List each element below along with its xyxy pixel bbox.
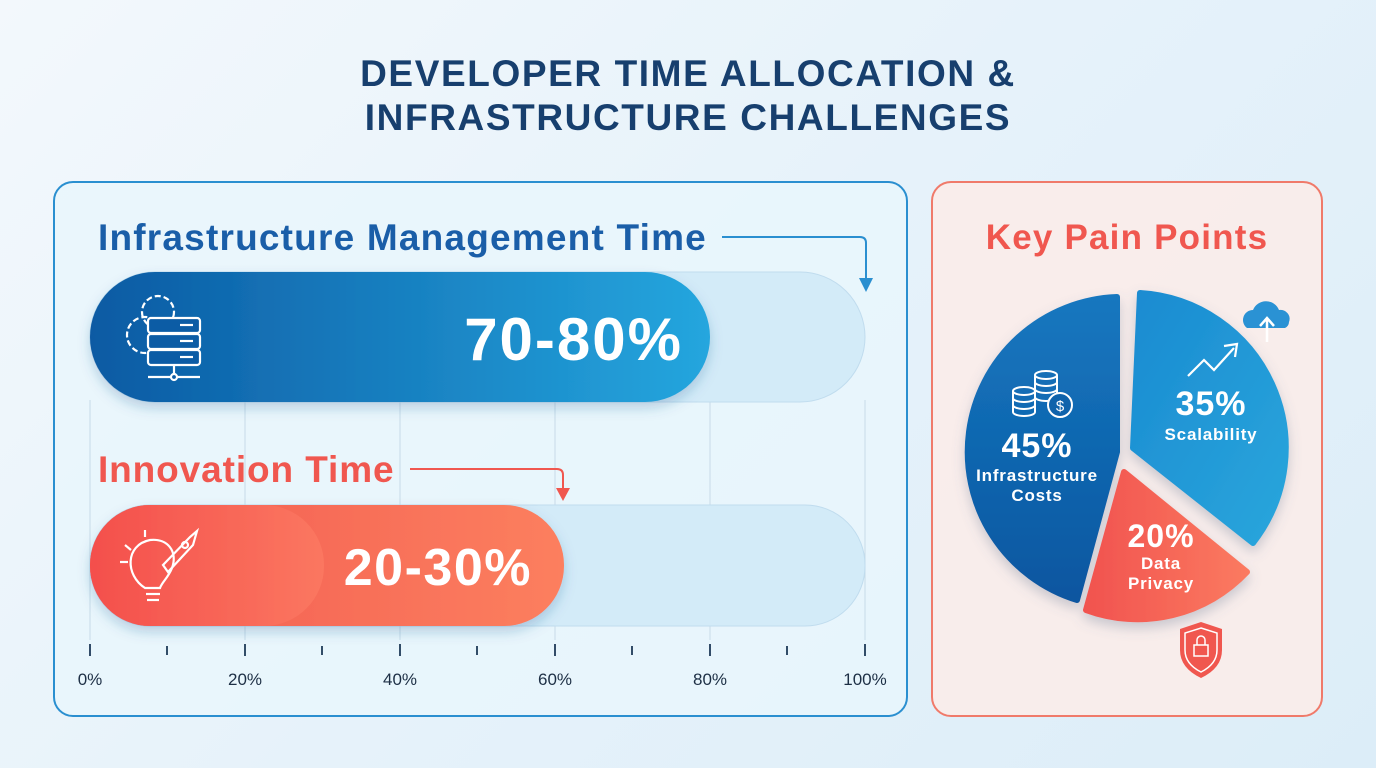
panel: key pain points	[931, 181, 1323, 717]
pie chart: pain points: $	[1056, 398, 1065, 415]
slice: scalability	[1133, 293, 1286, 543]
axis labels: 80%	[693, 670, 727, 689]
title: DEVELOPER TIME ALLOCATION &	[360, 53, 1016, 94]
arrow: infra	[722, 237, 873, 292]
label: 45% infrastructure costs: 45%	[1001, 427, 1073, 465]
title: INFRASTRUCTURE CHALLENGES	[365, 97, 1011, 138]
slice: data privacy	[1086, 472, 1247, 619]
icon: cloud upload	[1243, 301, 1290, 342]
label: 45% infrastructure costs: Infrastructure	[976, 466, 1098, 485]
label: 20% data privacy: Data	[1141, 554, 1181, 573]
bar: infra 70-80%	[90, 272, 710, 402]
axis labels: 60%	[538, 670, 572, 689]
heading: infrastructure management time: Infrastructure Management Time	[98, 217, 707, 258]
icon: gear server	[127, 296, 200, 380]
axis labels: 40%	[383, 670, 417, 689]
heading: key pain points: Key Pain Points	[986, 218, 1268, 257]
arrow: innovation	[410, 469, 570, 501]
axis ticks	[90, 644, 865, 656]
label: 35% scalability	[1165, 385, 1257, 444]
axis labels: 20%	[228, 670, 262, 689]
slice: infrastructure costs	[968, 297, 1117, 600]
label: 45% infrastructure costs	[976, 427, 1098, 505]
value: 20-30%: 20-30%	[344, 539, 532, 597]
axis labels: 100%	[843, 670, 887, 689]
axis labels: 0%	[78, 670, 102, 689]
icon: coins	[1013, 371, 1072, 417]
axis labels	[78, 670, 887, 689]
icon: trend arrow	[1188, 344, 1237, 376]
icon: shield lock	[1180, 622, 1222, 678]
panel: time allocation	[53, 181, 908, 717]
heading: innovation time: Innovation Time	[98, 449, 395, 490]
label: 20% data privacy: Privacy	[1128, 574, 1194, 593]
label: 35% scalability: 35%	[1175, 385, 1247, 423]
label: 45% infrastructure costs: Costs	[1011, 486, 1063, 505]
label: 20% data privacy: 20%	[1127, 518, 1195, 554]
bar: innovation 20-30%	[90, 505, 564, 626]
label: 20% data privacy	[1127, 518, 1195, 593]
bar: infra track	[90, 272, 865, 402]
label: 35% scalability: Scalability	[1165, 425, 1257, 444]
title	[360, 53, 1016, 138]
icon: bulb rocket	[120, 530, 197, 600]
value: 70-80%: 70-80%	[464, 306, 683, 373]
bar: innovation track	[90, 505, 865, 626]
